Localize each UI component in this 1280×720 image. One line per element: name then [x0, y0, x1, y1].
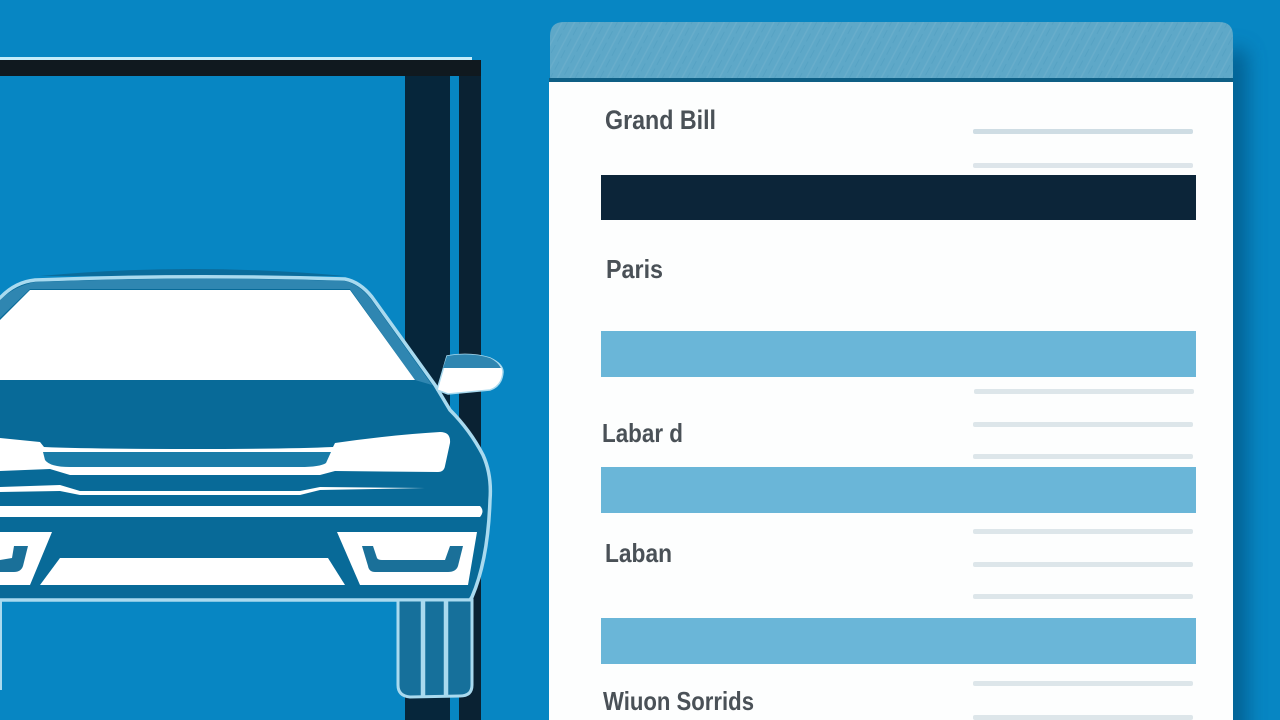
- right pillar: [459, 76, 481, 720]
- side mirror: [437, 354, 503, 394]
- headlights and grille surround: [0, 432, 450, 475]
- blue bar 2: [601, 467, 1196, 513]
- label: Labar d: Labar d: [602, 418, 683, 448]
- lower grille strip: [0, 485, 425, 495]
- lift frame: [0, 57, 481, 720]
- car body: [0, 277, 490, 600]
- bumper strip: [0, 506, 482, 517]
- frame top beam: [0, 60, 481, 76]
- roof band: [0, 279, 432, 385]
- dark bar: [601, 175, 1196, 220]
- windshield: [0, 290, 415, 380]
- blue bar 3: [601, 618, 1196, 664]
- panel shadow: [1222, 50, 1246, 720]
- label: Laban: Laban: [605, 538, 672, 568]
- document sheet: [549, 82, 1233, 720]
- left fog lamp: [0, 532, 52, 585]
- label: Wiuon Sorrids: Wiuon Sorrids: [603, 686, 754, 716]
- left wheel edge: [0, 600, 2, 690]
- document header: [550, 22, 1233, 80]
- rule lines group 4: [973, 681, 1193, 720]
- blue bar 1: [601, 331, 1196, 377]
- grille opening: [43, 452, 331, 467]
- left pillar: [405, 76, 450, 720]
- heading: Grand Bill: Grand Bill: [605, 105, 716, 135]
- panel: bill document: [549, 22, 1233, 720]
- right fog lamp: [337, 532, 477, 585]
- rule lines group 3: [973, 529, 1193, 599]
- right fog lamp detail: [362, 546, 463, 572]
- frame highlight: [0, 57, 472, 60]
- header rule: [549, 78, 1233, 82]
- left fog lamp detail: [0, 546, 28, 572]
- label: Paris: Paris: [606, 254, 663, 284]
- car front illustration: [0, 269, 503, 697]
- right wheel: [398, 600, 472, 697]
- rule lines group 1: [973, 129, 1193, 168]
- roof shadow: [40, 269, 345, 276]
- rule lines group 2: [973, 389, 1194, 459]
- lower air intake: [40, 558, 345, 585]
